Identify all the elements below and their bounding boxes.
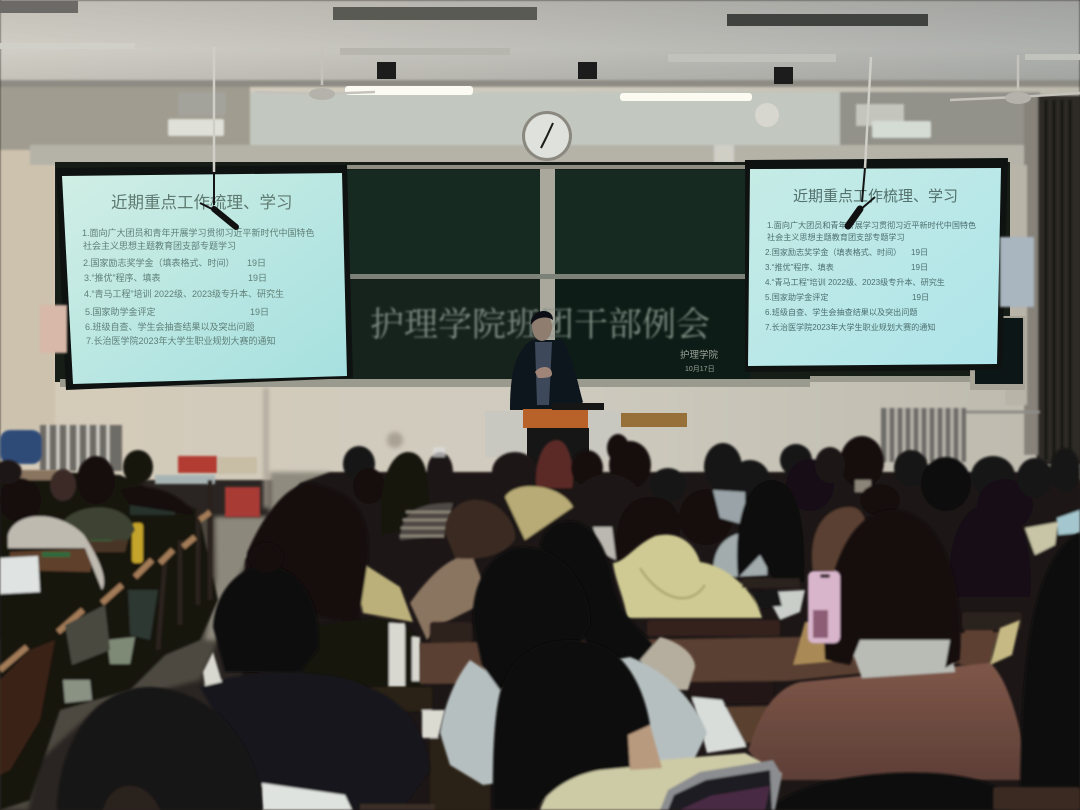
ceiling and wall background xyxy=(0,0,1080,480)
slide title: 近期重点工作梳理、学习 xyxy=(111,193,292,212)
wall speaker xyxy=(755,103,779,127)
hanging microphone left xyxy=(200,47,236,227)
wall clock xyxy=(522,111,572,161)
radiator left xyxy=(0,425,122,471)
slide list: 2.国家励志奖学金（填表格式、时间） xyxy=(765,247,901,257)
right edge chair xyxy=(993,787,1080,810)
slide list: 3.“推优”程序、填表 xyxy=(765,262,834,272)
slide list: 3.“推优”程序、填表 xyxy=(84,272,161,283)
brown hoodie student with long hair xyxy=(748,510,1027,780)
slide list xyxy=(765,220,976,332)
slide list: 4.“青马工程”培训 2022级、2023级专升本、研究生 xyxy=(84,288,284,299)
slide list: 6.班级自查、学生会抽查结果以及突出问题 xyxy=(765,307,917,317)
ceiling fan left xyxy=(255,47,375,100)
slide list: 社会主义思想主题教育团支部专题学习 xyxy=(83,240,236,251)
striped sweater student xyxy=(400,503,453,540)
slide list: 7.长治医学院2023年大学生职业规划大赛的通知 xyxy=(86,335,276,346)
left wall notice xyxy=(40,305,67,353)
right edge student xyxy=(1020,532,1080,790)
dark hair student with cream sleeve and black jacket xyxy=(247,483,425,687)
tan coat student xyxy=(410,500,515,640)
hanging microphone right xyxy=(848,57,875,226)
slide list: 19日 xyxy=(911,263,928,272)
yellow jacket student xyxy=(505,486,573,540)
right projection slide xyxy=(745,158,1008,372)
pink phone xyxy=(808,571,840,643)
pale yellow hoodie student xyxy=(613,535,805,620)
slide title: 近期重点工作梳理、学习 xyxy=(793,188,958,205)
chalk signature xyxy=(680,349,719,373)
radiator right xyxy=(881,408,1040,462)
left aisle floor xyxy=(0,517,272,810)
row of desks xyxy=(0,505,210,775)
black coat student front left xyxy=(200,543,435,810)
left side desks and students xyxy=(0,450,260,810)
aisle floor bright part xyxy=(205,517,270,640)
left projection slide xyxy=(56,165,353,390)
wall lower details xyxy=(264,388,403,522)
slide list: 19日 xyxy=(912,293,929,302)
slide list: 1.面向广大团员和青年开展学习贯彻习近平新时代中国特色 xyxy=(767,220,976,230)
slide list xyxy=(82,227,315,346)
slide list: 1.面向广大团员和青年开展学习贯彻习近平新时代中国特色 xyxy=(82,227,315,238)
ceiling lights and vents xyxy=(0,1,1080,101)
long-haired student centre xyxy=(540,521,695,690)
blackboard xyxy=(55,162,1025,390)
slide list: 19日 xyxy=(911,248,928,257)
lectern xyxy=(485,403,687,470)
audience back rows xyxy=(240,434,1080,810)
ceiling fan right xyxy=(950,55,1080,104)
chalk heading on blackboard: 护理学院班团干部例会 xyxy=(370,297,710,346)
desks middle row xyxy=(370,612,1022,810)
slide list: 19日 xyxy=(247,258,266,268)
chalk signature: 护理学院 xyxy=(680,349,719,361)
slide list: 5.国家助学金评定 xyxy=(85,306,156,317)
right wall notice xyxy=(1000,237,1034,307)
slide list: 19日 xyxy=(250,307,269,317)
front centre student with pale hoodie and phone xyxy=(493,640,782,810)
slide list: 7.长治医学院2023年大学生职业规划大赛的通知 xyxy=(765,322,935,332)
speaker teacher xyxy=(510,311,583,410)
white top student with hair xyxy=(440,547,707,785)
slide list: 5.国家助学金评定 xyxy=(765,292,828,302)
slide list: 2.国家励志奖学金（填表格式、时间） xyxy=(83,257,235,268)
chalk signature: 10月17日 xyxy=(685,365,715,373)
slide list: 4.“青马工程”培训 2022级、2023级专升本、研究生 xyxy=(765,277,945,287)
projector right xyxy=(856,104,931,138)
head front left corner xyxy=(57,687,263,810)
slide list: 社会主义思想主题教育团支部专题学习 xyxy=(767,232,905,242)
projector left xyxy=(168,92,226,136)
slide list: 6.班级自查、学生会抽查结果以及突出问题 xyxy=(85,321,255,332)
bottom right dark heads xyxy=(770,773,1010,810)
slide list: 19日 xyxy=(248,273,267,283)
